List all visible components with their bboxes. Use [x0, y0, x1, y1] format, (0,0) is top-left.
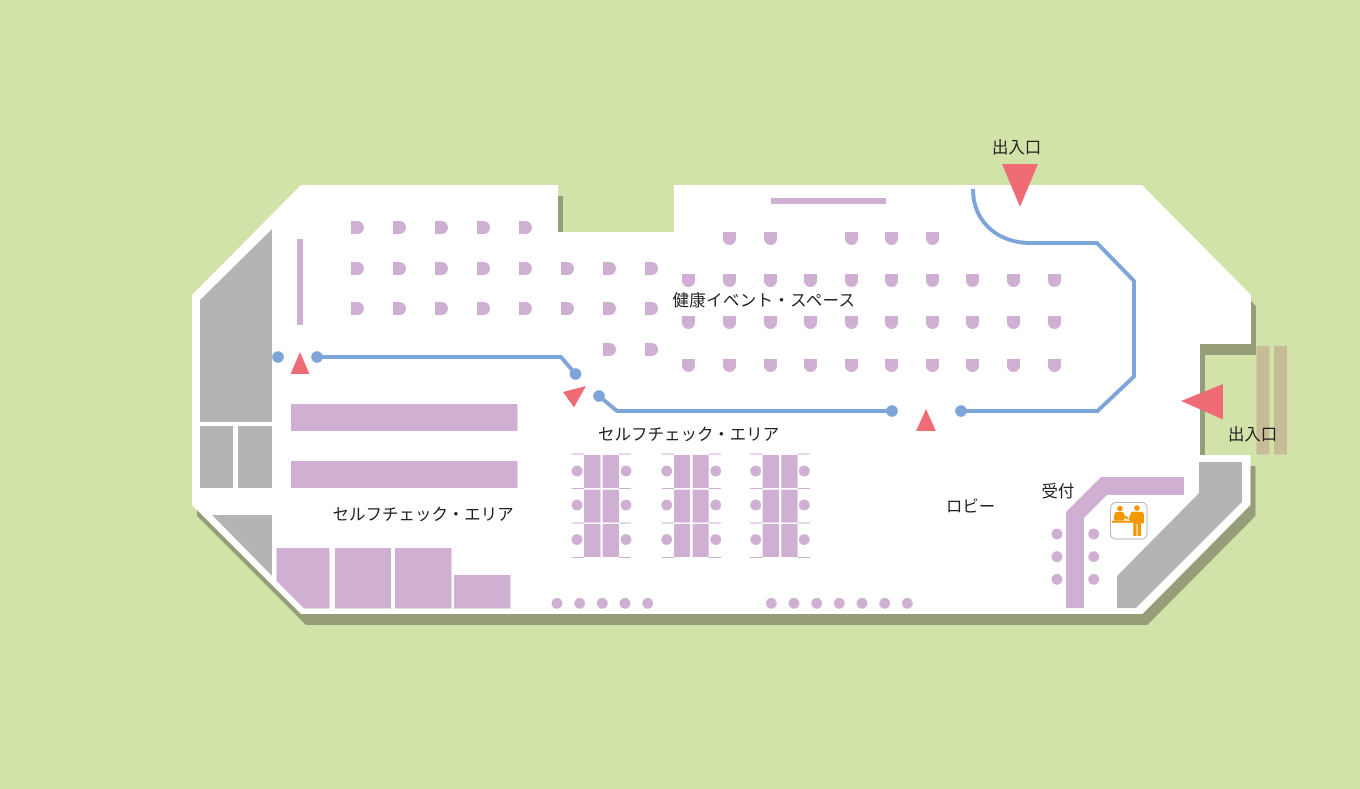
panel: front-facing seats [682, 232, 1061, 372]
reception counter and stools [1052, 477, 1184, 608]
arrow: south up [916, 409, 936, 431]
arrow: north entrance [1002, 164, 1038, 207]
label: self-check area west: セルフチェック・エリア [332, 505, 514, 524]
arrow: west up [290, 352, 310, 374]
desks group 3 [750, 454, 810, 558]
icon: reception desk with two people [1110, 502, 1147, 539]
grey utility rooms [200, 229, 1242, 608]
desks group 1 [572, 454, 631, 558]
panel: self-check desks [572, 454, 810, 558]
desks group 2 [661, 454, 721, 558]
route line: south corridor [593, 390, 898, 417]
label: health event space: 健康イベント・スペース [672, 291, 855, 310]
arrow: east entrance [1181, 384, 1223, 420]
waiting stools along south wall [552, 598, 913, 609]
panel: left self-check area furniture [276, 404, 518, 608]
panel: health event space seating [297, 198, 886, 356]
building shadow [197, 196, 1256, 625]
floor plate [192, 185, 1251, 614]
entrance steps [1256, 346, 1287, 454]
label: self-check area centre: セルフチェック・エリア [598, 425, 779, 444]
label: north entrance: 出入口 [992, 139, 1041, 157]
label: lobby: ロビー [946, 498, 995, 516]
label: east entrance: 出入口 [1228, 426, 1277, 444]
left-facing seats [351, 221, 658, 356]
label: reception: 受付 [1042, 483, 1074, 501]
arrow: diagonal [563, 386, 586, 408]
route line: north-west queue [272, 351, 581, 380]
route line: east loop [955, 189, 1134, 417]
